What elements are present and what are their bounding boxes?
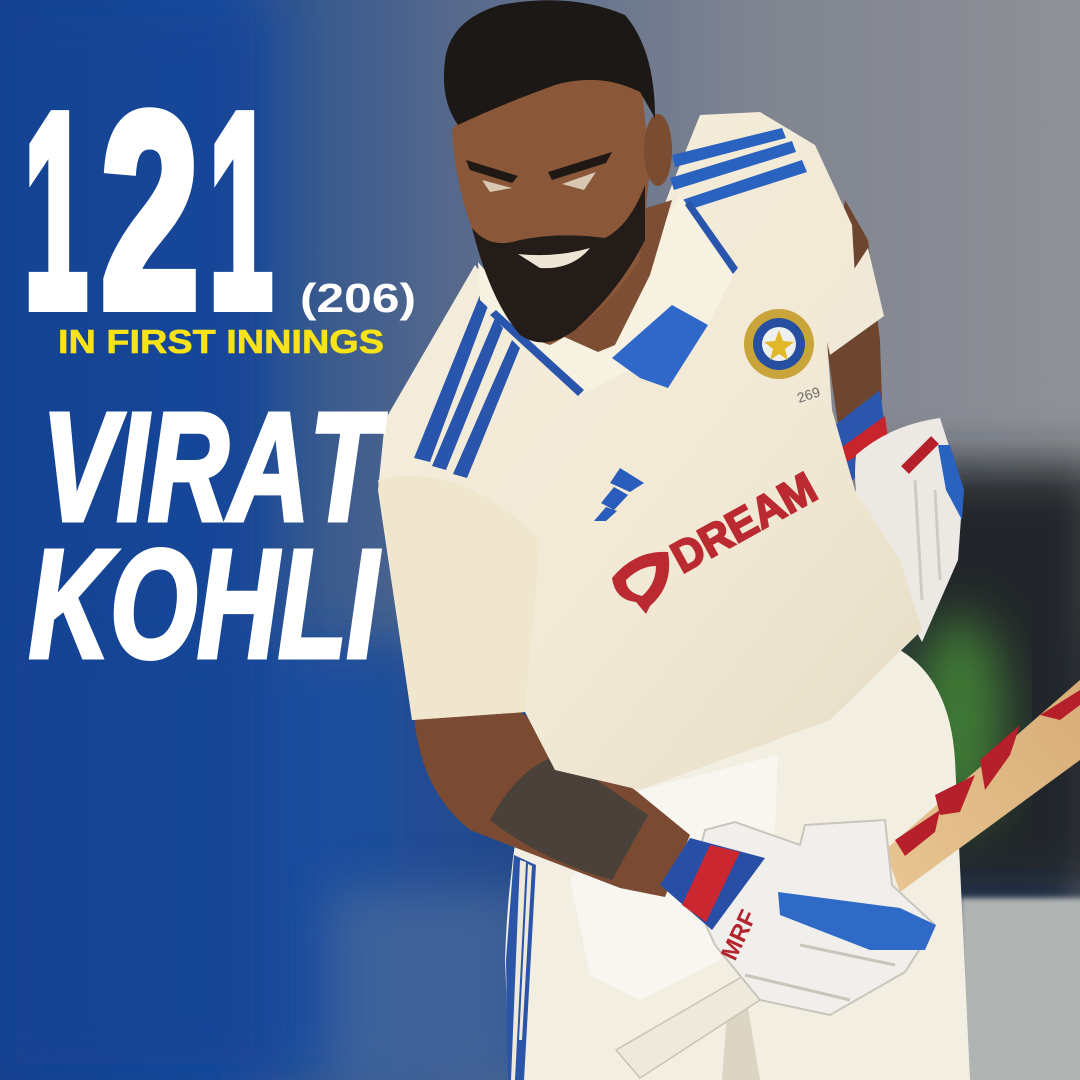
eyes [482, 172, 596, 192]
jersey number: 269 [795, 383, 822, 406]
head [444, 0, 672, 345]
balls faced: (206): (206) [300, 275, 416, 321]
beard [472, 185, 645, 342]
score: 121 [24, 57, 273, 365]
right shoulder stripes [670, 128, 807, 210]
tattoo [490, 755, 648, 880]
trouser side stripes [506, 855, 536, 1080]
front glove [660, 820, 936, 1015]
player name: Kohli: KOHLI [29, 518, 380, 690]
armband [822, 248, 884, 355]
player: Virat Kohli [378, 0, 1080, 1080]
bat handle [616, 975, 760, 1078]
front glove: MRF [716, 906, 762, 965]
far arm [826, 200, 882, 425]
neck [560, 200, 672, 352]
shirt torso [378, 112, 922, 790]
BCCI crest [744, 309, 814, 379]
trousers [505, 650, 970, 1080]
eyebrows [466, 152, 612, 183]
score: 121: 1 [24, 57, 88, 365]
Dream11 sponsor [612, 463, 825, 614]
collar placket [612, 305, 708, 388]
hair [444, 0, 655, 125]
smile [518, 248, 590, 268]
adidas logo [594, 468, 644, 521]
ear [644, 114, 672, 186]
forearm [414, 712, 690, 897]
left sleeve stripes [414, 295, 520, 478]
sleeve panel [378, 476, 540, 720]
score: 121: 2 [101, 57, 199, 365]
far glove [855, 418, 963, 642]
towel [570, 755, 778, 1000]
Dream11 sponsor: DREAM [663, 463, 825, 583]
collar [478, 195, 735, 396]
subheading: in first innings: IN FIRST INNINGS [58, 323, 384, 360]
far wrist guard [835, 390, 888, 482]
infographic canvas: 1 [209, 57, 273, 365]
player name: Virat: VIRAT [42, 381, 386, 553]
bat [885, 680, 1080, 892]
bat stickers [895, 690, 1080, 856]
